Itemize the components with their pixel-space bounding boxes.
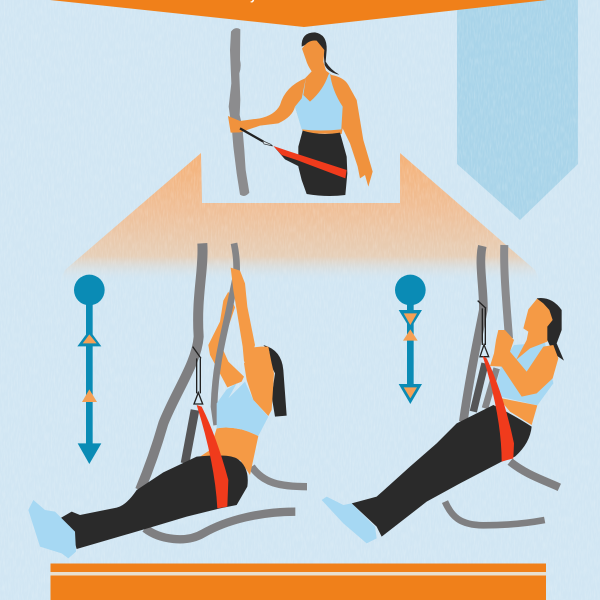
ribbon: pale blue hanging banner (457, 0, 578, 220)
sports top (495, 343, 553, 405)
icon: short range of motion arrow (395, 275, 426, 404)
red strap (197, 405, 228, 508)
shoe (28, 500, 76, 558)
sports top (217, 382, 268, 436)
figure: standing person holding strap (228, 28, 373, 196)
shoe (322, 497, 377, 543)
top banner (50, 0, 547, 27)
carabiner (263, 141, 273, 146)
red strap (273, 146, 347, 178)
main rope (463, 246, 483, 422)
pants (298, 131, 347, 196)
icon: long range of motion arrow (74, 275, 105, 464)
dark strap (473, 363, 485, 412)
red strap (483, 356, 514, 462)
hair (537, 298, 564, 361)
second rope (504, 245, 509, 338)
back arm (208, 292, 244, 387)
figure: person pulled up with elbows bent (322, 245, 564, 543)
rope (229, 28, 249, 196)
hair (302, 32, 339, 75)
arrow: peach arrow spreading from top figure to lower figures (60, 153, 540, 282)
bottom bars (50, 564, 546, 600)
sling and ring (193, 347, 203, 404)
hair (263, 345, 287, 417)
lower ropes (510, 462, 559, 487)
figure: person leaning back with arms extended (28, 243, 307, 558)
strap shade (274, 147, 300, 167)
head and torso (244, 347, 274, 416)
front arm (231, 268, 255, 363)
arm (490, 330, 558, 397)
pants (352, 405, 532, 537)
neck and head (516, 298, 555, 360)
skin (228, 40, 373, 187)
midriff (200, 428, 258, 475)
main rope (140, 243, 203, 490)
sling and ring (478, 301, 489, 357)
lower ropes (145, 512, 295, 539)
connector (240, 128, 263, 142)
sports top (295, 73, 343, 130)
dark strap (185, 410, 195, 463)
second rope (214, 243, 237, 425)
pants (60, 455, 248, 549)
midriff (498, 398, 537, 425)
